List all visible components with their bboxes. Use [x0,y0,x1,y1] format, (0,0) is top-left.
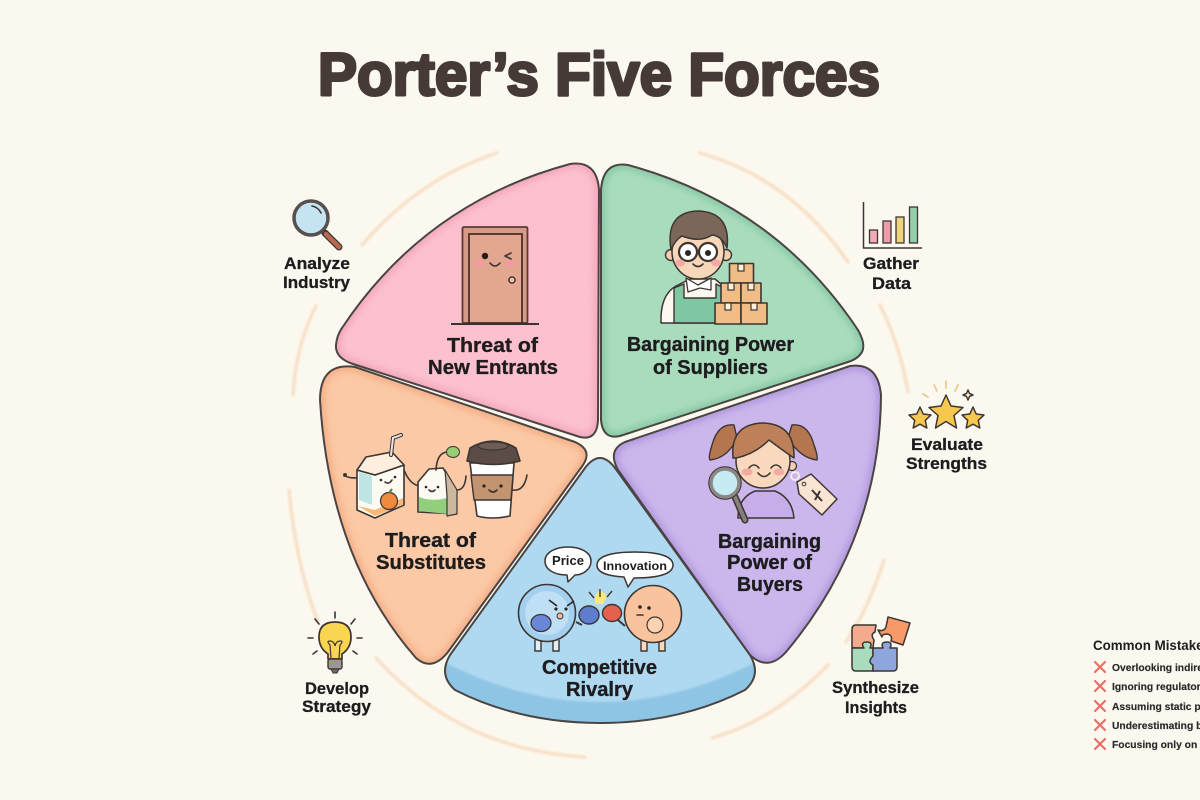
icon: boxing characters with speech bubbles: Price [552,554,584,568]
icon: boxing characters with speech bubbles: Innovation [603,559,667,573]
icon: jigsaw puzzle [852,617,910,671]
label: bargaining power of buyers: Buyers [737,574,803,596]
label: competitive rivalry: Competitive [542,657,657,679]
label: evaluate strengths: Strengths [906,454,987,473]
label: develop strategy: Develop [305,679,369,698]
label: threat of substitutes: Substitutes [376,552,486,574]
label: bargaining power of suppliers: Bargaining Power [627,334,794,356]
step: develop strategy [302,612,372,716]
label: synthesize insights: Synthesize [832,678,919,697]
label: analyze industry: Industry [283,273,351,292]
step: synthesize insights [832,617,919,717]
icon: supplier with boxes [661,211,767,324]
label: bargaining power of suppliers: of Suppliers [653,357,768,379]
step: gather data [863,202,922,293]
infographic canvas [284,50,1200,760]
label: bargaining power of suppliers [627,334,794,379]
label: gather data [863,254,919,293]
panel: competitive rivalry [444,457,756,724]
label: evaluate strengths: Evaluate [911,435,983,454]
icon: magnifying glass [294,201,339,247]
label: analyze industry [283,254,351,292]
label: analyze industry: Analyze [284,254,350,273]
icon: juice carton, tea bag and coffee cup [343,435,527,518]
label: synthesize insights [832,678,919,717]
icon: boxing characters with speech bubbles [518,547,682,651]
step: analyze industry [283,201,351,292]
icon: light bulb [308,612,362,673]
label: develop strategy: Strategy [302,697,372,716]
panel: threat of new entrants [336,164,599,438]
label: threat of new entrants [428,335,558,379]
panel: common mistakes [1093,638,1200,751]
panel: bargaining power of suppliers [601,165,863,437]
panel: bargaining power of buyers [614,366,881,663]
label: gather data: Data [872,274,912,293]
label: develop strategy [302,679,372,716]
label: bargaining power of buyers: Power of [727,552,812,574]
icon: three stars [909,381,984,428]
label: bargaining power of buyers: Bargaining [718,531,821,553]
icon: winking door [451,227,539,324]
list: mistakes [1095,662,1200,751]
label: competitive rivalry: Rivalry [566,679,634,701]
icon: bar chart [864,202,922,248]
label: evaluate strengths [906,435,987,473]
step: evaluate strengths [906,381,987,473]
label: competitive rivalry [542,657,657,701]
title: Porter’s Five Forces [318,41,880,108]
label: threat of new entrants: Threat of [447,335,538,357]
icon: girl with magnifier and price tag [709,423,837,520]
label: synthesize insights: Insights [845,698,907,717]
outer cycle arcs [289,153,908,757]
label: threat of new entrants: New Entrants [428,357,558,379]
label: threat of substitutes: Threat of [385,530,476,552]
label: threat of substitutes [376,530,486,574]
panel: threat of substitutes [320,366,587,664]
label: bargaining power of buyers [718,531,821,596]
label: gather data: Gather [863,254,919,273]
